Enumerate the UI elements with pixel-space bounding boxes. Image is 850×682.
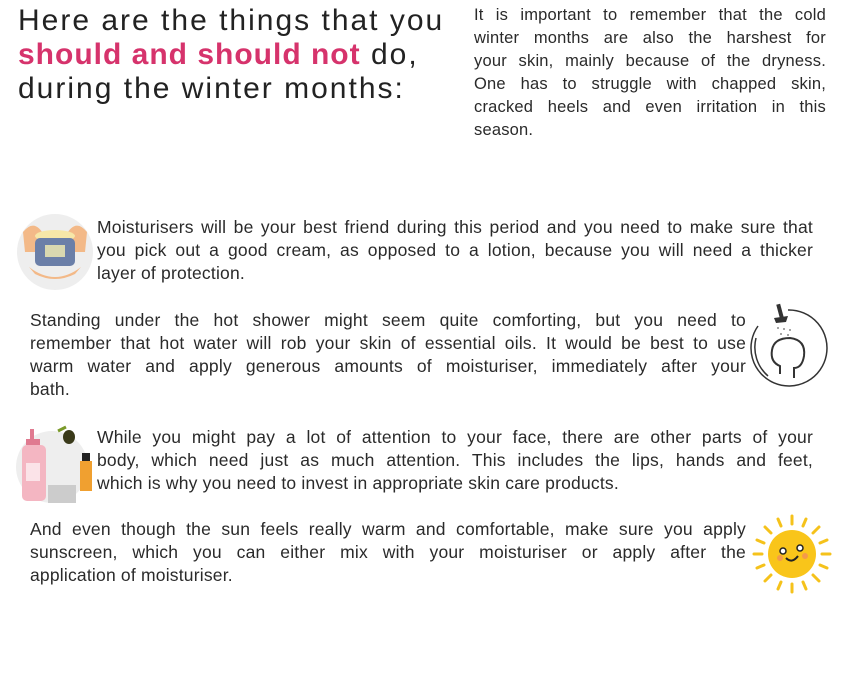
icon: shower head bbox=[750, 304, 828, 387]
text: hot shower: remember that hot water will rob your skin of essential oils. It would be best to use bbox=[30, 333, 746, 353]
text: body care bbox=[97, 427, 813, 493]
text: moisturisers bbox=[97, 217, 813, 283]
text: hot shower bbox=[30, 310, 746, 399]
text: sunscreen: sunscreen, which you can either mix with your moisturiser or apply after the bbox=[30, 542, 746, 562]
text: sunscreen: And even though the sun feels really warm and comfortable, make sure you apply bbox=[30, 519, 746, 539]
icon: skin care products bbox=[16, 426, 92, 503]
icon: smiling sun bbox=[752, 514, 832, 594]
intro text: winter months are also the harshest for bbox=[474, 29, 826, 47]
intro text: cracked heels and even irritation in this bbox=[474, 98, 826, 116]
text: body care: which is why you need to invest in appropriate skin care products. bbox=[97, 473, 619, 493]
text: moisturisers: you pick out a good cream, as opposed to a lotion, because you will need a thicker bbox=[97, 240, 813, 260]
text: sunscreen bbox=[30, 519, 746, 585]
title: should and should not do, bbox=[18, 38, 419, 71]
text: sunscreen: application of moisturiser. bbox=[30, 565, 233, 585]
intro text: your skin, mainly because of the dryness. bbox=[474, 52, 826, 70]
text: hot shower: bath. bbox=[30, 379, 70, 399]
title: during the winter months: bbox=[18, 72, 405, 105]
text: hot shower: Standing under the hot shower might seem quite comforting, but you need to bbox=[30, 310, 746, 330]
text: hot shower: warm water and apply generous amounts of moisturiser, immediately after your bbox=[30, 356, 746, 376]
intro text: One has to struggle with chapped skin, bbox=[474, 75, 826, 93]
intro text: season. bbox=[474, 121, 533, 139]
title bbox=[18, 4, 444, 105]
text: body care: body, which need just as much attention. This includes the lips, hands and feet, bbox=[97, 450, 813, 470]
text: moisturisers: layer of protection. bbox=[97, 263, 245, 283]
text: body care: While you might pay a lot of attention to your face, there are other parts of your bbox=[97, 427, 813, 447]
text: moisturisers: Moisturisers will be your best friend during this period and you need to make sure that bbox=[97, 217, 813, 237]
intro text bbox=[474, 6, 826, 139]
icon: cream jar in hands bbox=[17, 214, 93, 290]
title: Here are the things that you bbox=[18, 4, 444, 37]
intro text: It is important to remember that the cold bbox=[474, 6, 826, 24]
